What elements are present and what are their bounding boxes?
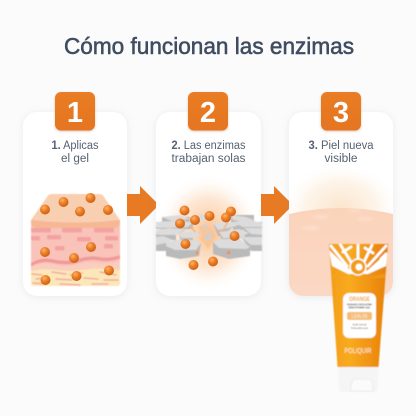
product label: Gentle formula [352,324,367,326]
card 3 background [289,112,393,296]
product label [343,293,376,338]
step 2 caption: 2. Las enzimas [172,140,246,152]
gel particles [40,193,114,285]
illustration: renewed skin [289,174,393,296]
product label: Peeling without peel [351,327,368,330]
badge 1: 1 [67,97,83,129]
crest sun [350,259,366,275]
product label: LEN-35 [352,314,368,320]
panel: step 1 [23,92,127,296]
tube cap [338,367,378,392]
rock sides [156,215,262,259]
product: orange gel tube [329,244,388,392]
central fracture [198,225,216,249]
card 2 background [156,112,261,296]
step 1 caption: 1. Aplicas [52,140,99,152]
badge 1 [55,92,95,130]
step 1 caption line 2: el gel [61,153,89,165]
rock tops [156,214,262,250]
step 3 caption: 3. Piel nueva [308,140,374,152]
badge 2: 2 [200,97,216,129]
badge 2 [188,92,228,130]
panel: step 3 [288,92,394,298]
panel: step 2 [156,92,262,296]
badge 3: 3 [333,97,349,129]
orange glow [156,173,262,293]
card 1 background [23,112,127,296]
badge 3 [321,92,361,130]
illustration: skin layers with gel particles [31,194,120,286]
product label: ORANGE [349,297,370,303]
brand name: POLIQUIR [344,348,372,355]
product label: RADIANCE EXFOLIATING [347,304,372,306]
product label: BRIGHTENING GEL [348,306,371,310]
tube body [329,244,388,367]
arrow 1 to 2 [127,186,159,224]
arrow 2 to 3 [261,186,293,224]
white branch crest [329,244,388,279]
step 3 caption line 2: visible [324,153,358,165]
illustration: breaking skin cells [156,214,262,259]
title: Cómo funcionan las enzimas [64,33,354,59]
step 2 caption line 2: trabajan solas [172,153,246,165]
enzyme particles [175,206,240,270]
